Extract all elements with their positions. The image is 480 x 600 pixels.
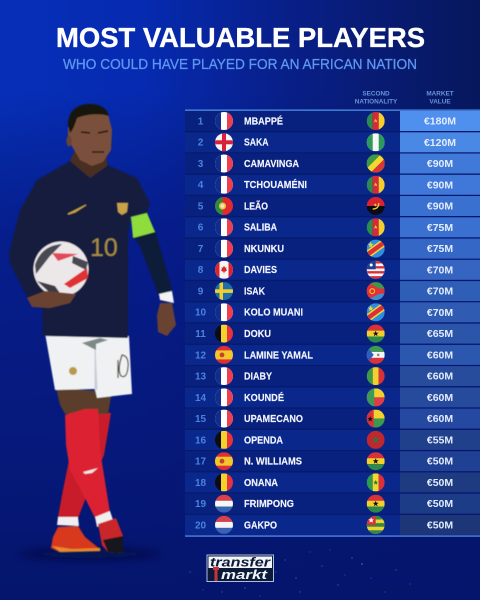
row 15: 15 [195,414,206,425]
row 6: 6 [198,223,204,234]
back boot [51,526,101,552]
row 18: €50M [427,477,453,489]
row 11: €65M [427,328,453,340]
row 10: KOLO MUANI [244,308,303,319]
row 3: €90M [427,158,453,170]
row 11 [185,324,480,344]
row 14 [185,387,480,407]
shorts [45,333,132,398]
row 1: €180M [424,116,456,128]
transfermarkt logo: transfer [210,556,271,570]
thighs [56,388,112,414]
row 20: GAKPO [244,520,277,531]
row 13 [185,366,480,386]
row 8: 8 [198,265,204,276]
row 8: €70M [427,264,453,276]
row 5 [185,196,480,216]
row 15 [185,409,480,429]
row 7: NKUNKU [244,244,284,255]
row 12: LAMINE YAMAL [244,350,313,361]
row 17: N. WILLIAMS [244,457,302,468]
row 13: DIABY [244,372,272,383]
player photo illustration [9,104,176,558]
row 19: 19 [195,499,206,510]
row 1: 1 [198,116,204,127]
row 9 [185,281,480,301]
row 18: ONANA [244,478,278,489]
right arm [133,230,172,296]
header: market value: MARKET [426,90,454,98]
row 1: MBAPPÉ [244,114,283,127]
row 4 [185,175,480,195]
row 16: 16 [195,435,206,446]
row 9: 9 [198,287,204,298]
row 6: €75M [427,222,453,234]
row 12: 12 [195,350,206,361]
row 19 [185,494,480,514]
row 2: €120M [424,137,456,149]
row 1 [185,111,480,131]
crest and swoosh [68,205,86,214]
header: second nationality [355,90,398,106]
header: second nationality: NATIONALITY [355,98,398,106]
back leg sock [58,412,111,518]
row 13: 13 [195,372,206,383]
row 15: €60M [427,413,453,425]
row 15: UPAMECANO [244,414,303,425]
front leg sock [65,409,110,518]
subtitle: WHO COULD HAVE PLAYED FOR AN AFRICAN NATION [63,57,417,73]
row 2: SAKA [244,138,268,149]
row 7 [185,239,480,259]
row 6: SALIBA [244,223,277,234]
row 6 [185,217,480,237]
row 2 [185,132,480,152]
transfermarkt logo: markt [221,568,268,582]
row 4: TCHOUAMÉNI [244,178,307,191]
row 4: 4 [198,180,204,191]
row 10: €70M [427,307,453,319]
jersey torso and left arm [9,161,150,338]
row 17 [185,451,480,471]
ball [34,242,88,296]
row 19: €50M [427,498,453,510]
armband [131,213,155,238]
row 16: OPENDA [244,435,283,446]
row 5: €90M [427,200,453,212]
row 14: €60M [427,392,453,404]
row 16: €55M [427,434,453,446]
row 9: ISAK [244,287,266,298]
row 11: DOKU [244,329,271,340]
hands [27,291,76,308]
row 18: 18 [195,478,206,489]
header: second nationality: SECOND [362,90,390,98]
row 8: DAVIES [244,265,277,276]
row 10 [185,302,480,322]
row 18 [185,472,480,492]
row 7: 7 [198,244,204,255]
row 5: LEÃO [244,199,268,212]
title: MOST VALUABLE PLAYERS [56,22,425,53]
header: market value: VALUE [429,98,451,106]
row 19: FRIMPONG [244,499,294,510]
row 7: €75M [427,243,453,255]
head and neck [70,150,107,178]
row 9: €70M [427,286,453,298]
row 20: 20 [195,520,206,531]
row 3 [185,154,480,174]
row 12 [185,345,480,365]
row 16 [185,430,480,450]
row 17: €50M [427,456,453,468]
header: market value [426,90,454,106]
row 17: 17 [195,457,206,468]
row 20 [185,515,480,535]
row 2: 2 [198,138,204,149]
ranking table [185,110,480,537]
shirt number: 10 [90,234,118,262]
row 5: 5 [198,201,204,212]
row 4: €90M [427,179,453,191]
table column headers [355,90,454,106]
transfermarkt logo [207,555,274,582]
row 3: 3 [198,159,204,170]
row 10: 10 [195,308,206,319]
row 13: €60M [427,371,453,383]
row 3: CAMAVINGA [244,159,299,170]
front boot [98,518,123,553]
row 12: €60M [427,349,453,361]
row 8 [185,260,480,280]
row 20: €50M [427,519,453,531]
row 14: 14 [195,393,206,404]
row 11: 11 [195,329,206,340]
row 14: KOUNDÉ [244,391,284,404]
